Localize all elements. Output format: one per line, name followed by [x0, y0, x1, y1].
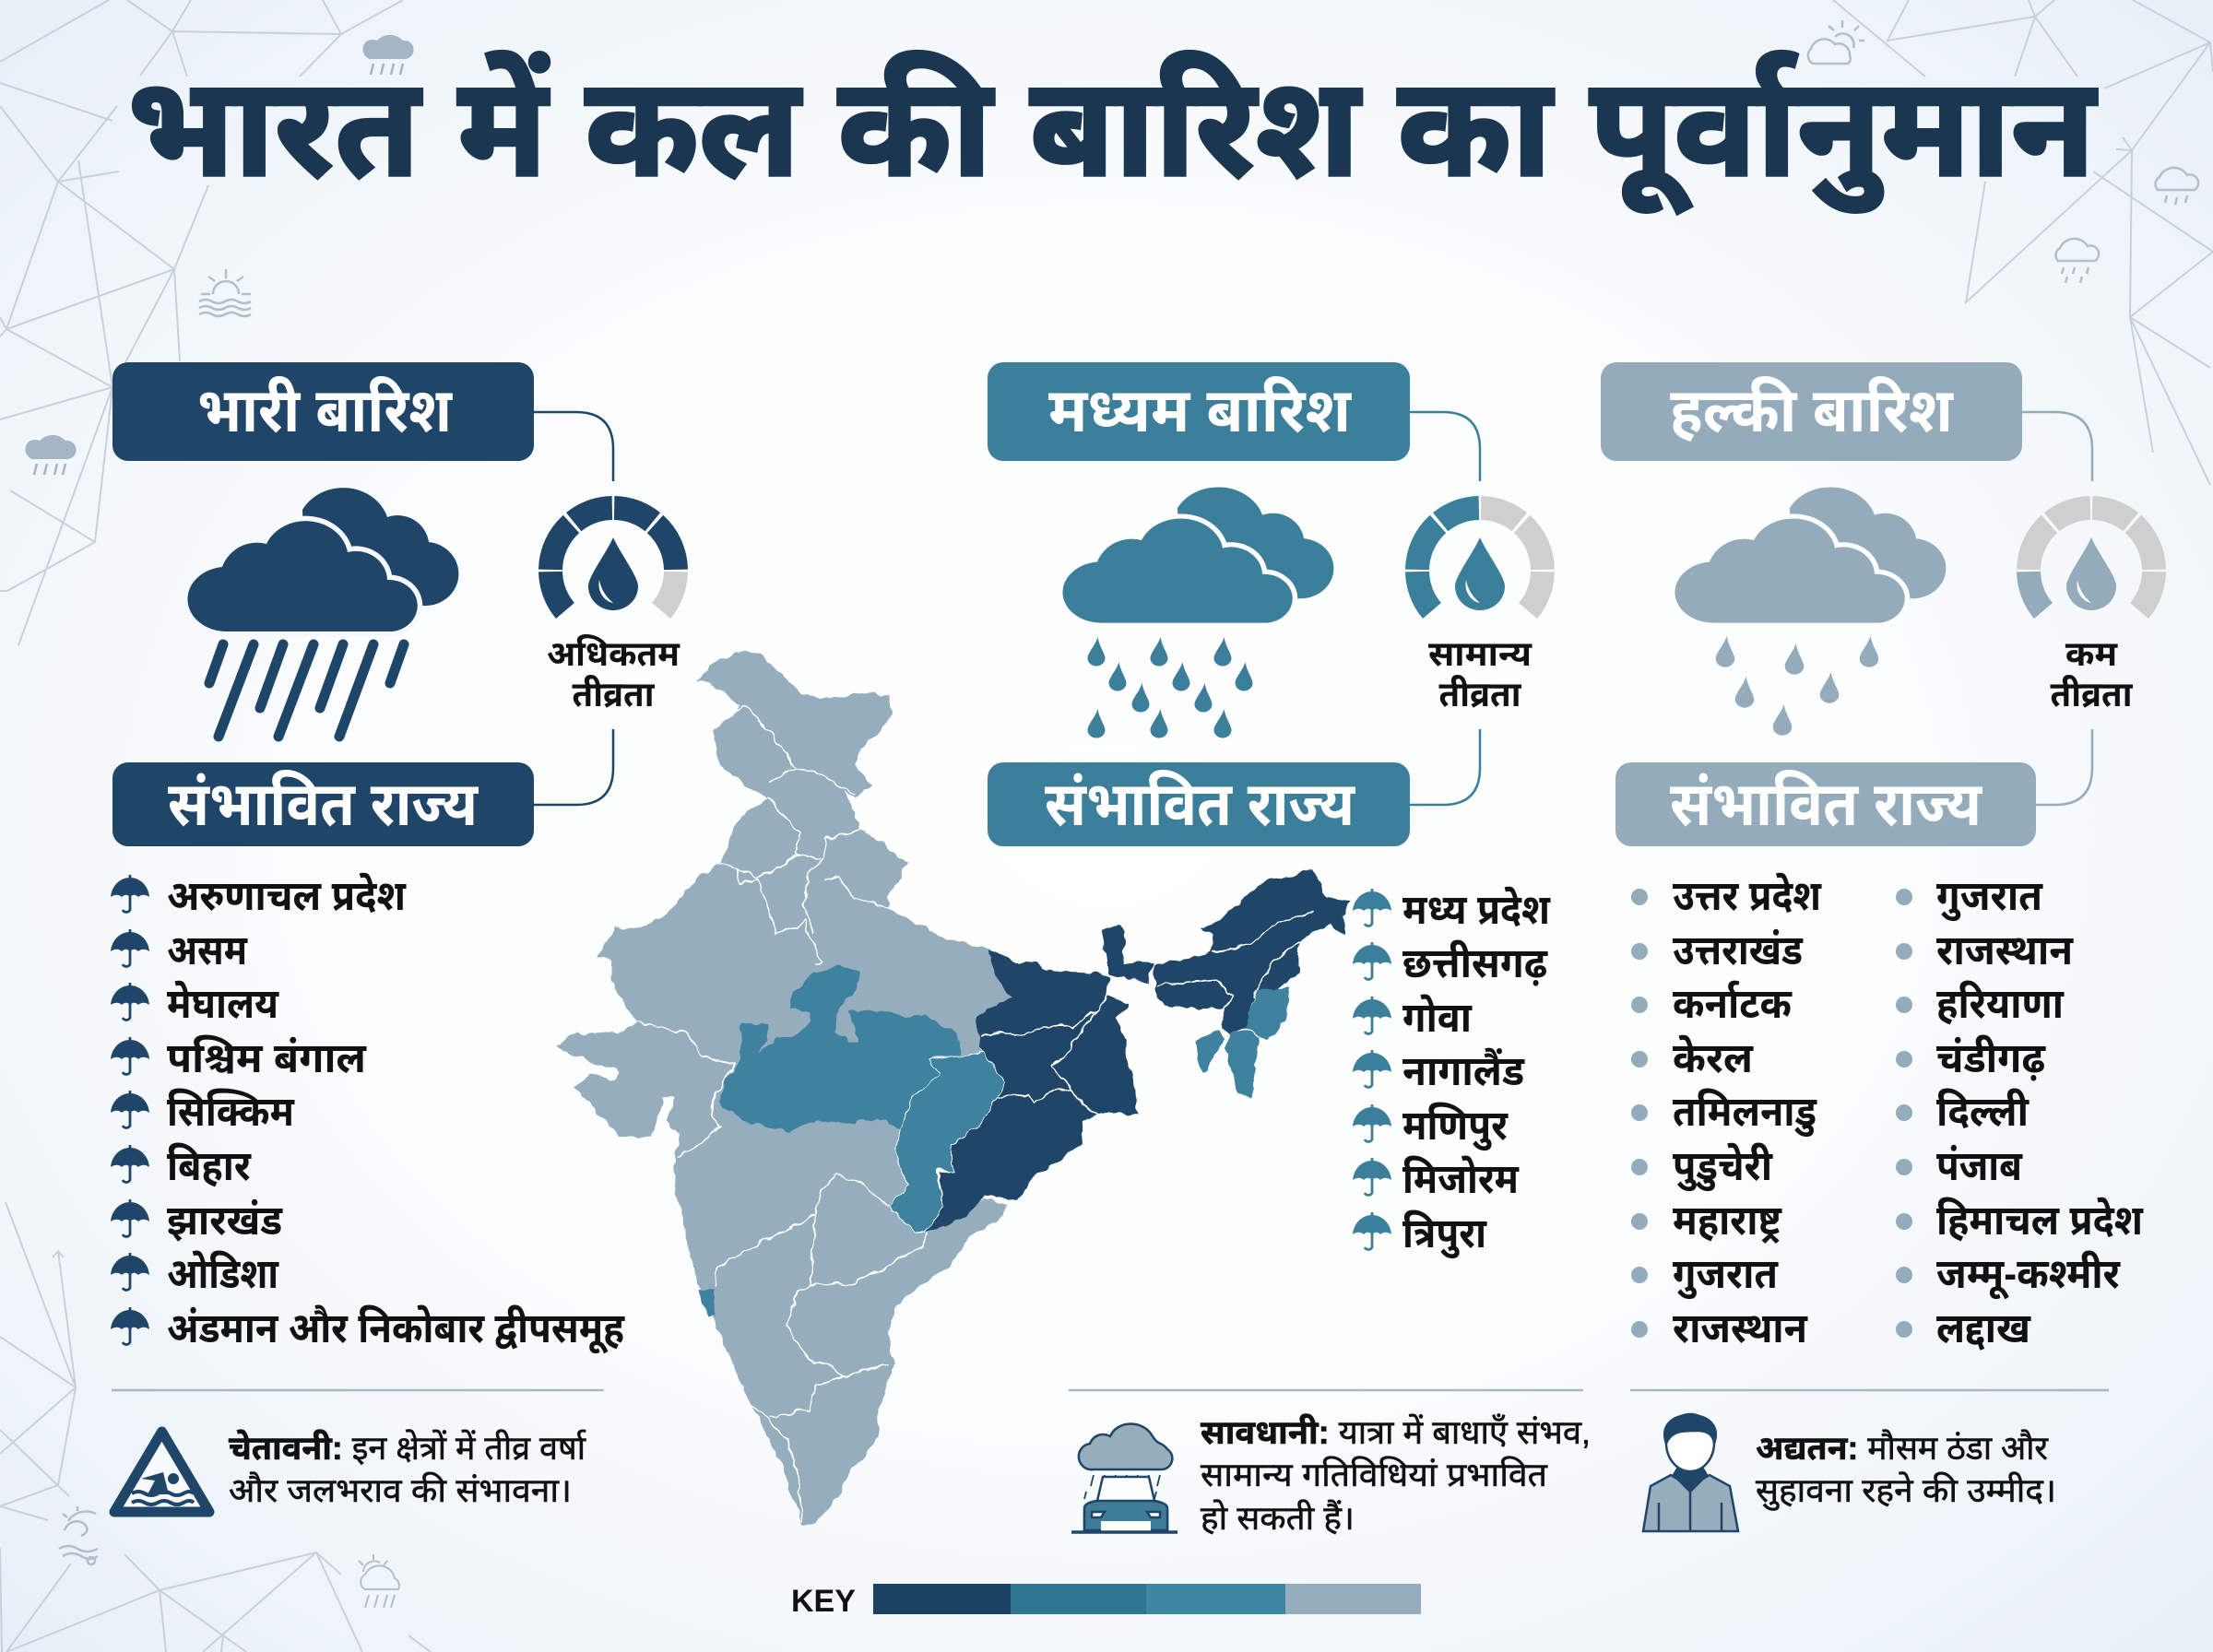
text: warning: और जलभराव की संभावना।	[229, 1471, 572, 1509]
list: heavy rain states: अंडमान और निकोबार द्वीपसमूह	[167, 1304, 625, 1354]
heading: moderate rain states: संभावित राज्य	[1045, 769, 1355, 839]
list: heavy rain states: सिक्किम	[167, 1088, 295, 1135]
connector: light rain bottom	[2036, 729, 2092, 805]
gauge label: low intensity	[2051, 635, 2133, 714]
icon: cloud and car	[1071, 1423, 1178, 1532]
list: light rain states: उत्तर प्रदेश	[1673, 872, 1822, 919]
list: moderate rain states: नागालैंड	[1402, 1047, 1525, 1094]
region: light rain states	[556, 652, 1011, 1524]
heading: moderate rain	[988, 362, 1410, 461]
heading: light rain states	[1615, 762, 2036, 846]
list: moderate rain states	[1353, 886, 1551, 1258]
connector: heavy rain top	[534, 412, 613, 481]
text: caution	[1201, 1412, 1591, 1537]
list: moderate rain states: छत्तीसगढ़	[1402, 939, 1548, 986]
heading: light rain states: संभावित राज्य	[1670, 769, 1982, 839]
text: caution: हो सकती हैं।	[1201, 1499, 1355, 1537]
icon: moderate rain cloud	[1062, 487, 1333, 738]
list: light rain states: हरियाणा	[1936, 980, 2065, 1027]
list: heavy rain states: बिहार	[167, 1142, 252, 1189]
title: भारत में कल की बारिश का पूर्वानुमान	[127, 50, 2098, 214]
list: light rain states: गुजरात	[1673, 1250, 1779, 1299]
state borders	[638, 706, 929, 1520]
text: caution: सावधानी: यात्रा में बाधाएँ संभव,	[1201, 1412, 1591, 1451]
list: light rain states: पुडुचेरी	[1673, 1142, 1773, 1191]
heading: light rain: हल्की बारिश	[1670, 375, 1954, 445]
list: light rain states: कर्नाटक	[1673, 980, 1793, 1027]
divider: caution	[1069, 1389, 1583, 1391]
list: moderate rain states: गोवा	[1402, 994, 1473, 1041]
list: light rain states: चंडीगढ़	[1936, 1034, 2046, 1081]
list: light rain states: केरल	[1673, 1034, 1754, 1081]
list: light rain states: हिमाचल प्रदेश	[1936, 1197, 2144, 1244]
list: light rain states: दिल्ली	[1936, 1088, 2030, 1135]
region: heavy rain states	[926, 867, 1349, 1233]
icon: light rain cloud	[1675, 487, 1946, 736]
heading: heavy rain states	[112, 762, 534, 846]
list: moderate rain states: मिजोरम	[1402, 1155, 1520, 1202]
heading: heavy rain	[112, 362, 534, 461]
list: light rain states: जम्मू-कश्मीर	[1936, 1250, 2121, 1300]
divider: warning	[112, 1389, 604, 1391]
text: update: अद्यतन: मौसम ठंडा और	[1756, 1429, 2049, 1467]
list: light rain states: राजस्थान	[1936, 926, 2074, 974]
list: moderate rain states: मध्य प्रदेश	[1402, 886, 1551, 933]
list: moderate rain states: मणिपुर	[1402, 1102, 1509, 1150]
list: light rain states: लद्दाख	[1936, 1304, 2031, 1351]
connector: light rain top	[2022, 412, 2092, 481]
heading: heavy rain: भारी बारिश	[197, 375, 453, 445]
list: light rain states: तमिलनाडु	[1673, 1088, 1817, 1137]
list: heavy rain states	[111, 872, 625, 1354]
text: warning	[229, 1428, 586, 1509]
icon: heavy rain cloud	[187, 488, 458, 737]
connector: heavy rain bottom	[534, 729, 613, 805]
list: heavy rain states: मेघालय	[167, 980, 279, 1027]
legend: key	[791, 1584, 1421, 1619]
region: moderate rain states	[698, 965, 1290, 1317]
list: light rain states: उत्तराखंड	[1673, 926, 1804, 974]
gauge label: maximum intensity: अधिकतम	[547, 633, 680, 674]
gauge: normal intensity	[1405, 496, 1555, 619]
gauge label: normal intensity: सामान्य	[1428, 635, 1533, 674]
text: caution: सामान्य गतिविधियां प्रभावित	[1201, 1456, 1549, 1493]
gauge: maximum intensity	[538, 496, 688, 619]
heading: light rain	[1601, 362, 2022, 461]
list: light rain states: पंजाब	[1936, 1142, 2023, 1189]
text: warning: चेतावनी: इन क्षेत्रों में तीव्र वर्षा	[229, 1428, 586, 1467]
list: heavy rain states: झारखंड	[167, 1197, 283, 1244]
list: moderate rain states: त्रिपुरा	[1402, 1210, 1487, 1258]
list: heavy rain states: ओडिशा	[167, 1250, 279, 1297]
gauge label: normal intensity: तीव्रता	[1438, 674, 1521, 714]
legend: key: KEY	[791, 1584, 856, 1619]
gauge label: low intensity: कम	[2065, 635, 2118, 674]
panel: moderate rain	[988, 362, 1555, 1258]
divider: update	[1630, 1389, 2109, 1391]
text: update	[1756, 1429, 2056, 1511]
connector: moderate rain top	[1410, 412, 1480, 481]
gauge label: maximum intensity	[547, 633, 680, 714]
connector: moderate rain bottom	[1410, 729, 1480, 805]
gauge label: normal intensity	[1428, 635, 1533, 714]
heading: moderate rain: मध्यम बारिश	[1048, 375, 1352, 445]
text: update: सुहावना रहने की उम्मीद।	[1756, 1471, 2056, 1511]
panel: light rain	[1601, 362, 2166, 1351]
list: light rain states: राजस्थान	[1673, 1304, 1808, 1351]
list: heavy rain states: पश्चिम बंगाल	[167, 1034, 367, 1081]
list: light rain states: गुजरात	[1936, 872, 2043, 921]
icon: person	[1643, 1414, 1738, 1531]
gauge label: low intensity: तीव्रता	[2051, 674, 2133, 714]
list: light rain states	[1631, 872, 2144, 1351]
list: heavy rain states: अरुणाचल प्रदेश	[167, 872, 407, 919]
heading: heavy rain states: संभावित राज्य	[168, 769, 479, 839]
heading: moderate rain states	[988, 762, 1410, 846]
panel: heavy rain	[111, 362, 688, 1354]
icon: flood warning	[114, 1432, 209, 1512]
list: heavy rain states: असम	[167, 926, 248, 974]
gauge: low intensity	[2017, 496, 2166, 619]
list: light rain states: महाराष्ट्र	[1673, 1197, 1782, 1245]
gauge label: maximum intensity: तीव्रता	[572, 674, 655, 714]
map of India	[556, 652, 1349, 1524]
